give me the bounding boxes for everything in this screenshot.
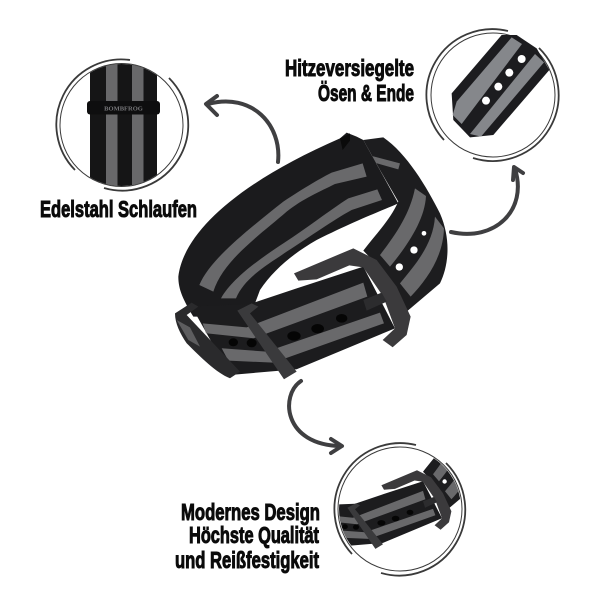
callout: Hitzeversiegelte Ösen & Ende: Ösen & Ende: [318, 80, 414, 106]
arrow: to Modernes Design: [289, 381, 342, 453]
infographic canvas: [40, 28, 560, 577]
callout: Hitzeversiegelte Ösen & Ende: [285, 29, 559, 161]
callout: Modernes Design: Höchste Qualität: [189, 522, 319, 548]
arrow: to Hitzeversiegelte: [451, 167, 523, 234]
inset photo: buckle closeup: [339, 458, 460, 549]
arrow: to Edelstahl Schlaufen: [206, 96, 278, 162]
inset ring bottom: [334, 443, 465, 576]
inset photo: strap with keeper: [87, 60, 160, 190]
inset photo: strap with keeper: BOMBFROG: [104, 106, 143, 112]
inset photo: heat sealed strap end: [452, 35, 549, 137]
main photo: NATO strap: [175, 133, 448, 379]
inset ring left: [56, 59, 188, 191]
label: Edelstahl Schlaufen: [40, 196, 197, 222]
inset ring right: [426, 29, 559, 161]
upper band: [178, 133, 398, 317]
callout: Modernes Design: und Reißfestigkeit: [175, 547, 319, 573]
label: Hitzeversiegelte: [285, 55, 414, 81]
buckle and lower band: [175, 248, 411, 379]
back loop band: [363, 137, 448, 312]
label: Modernes Design: [181, 499, 320, 525]
callout: Edelstahl Schlaufen: [40, 59, 197, 222]
callout: Modernes Design: [176, 442, 466, 577]
